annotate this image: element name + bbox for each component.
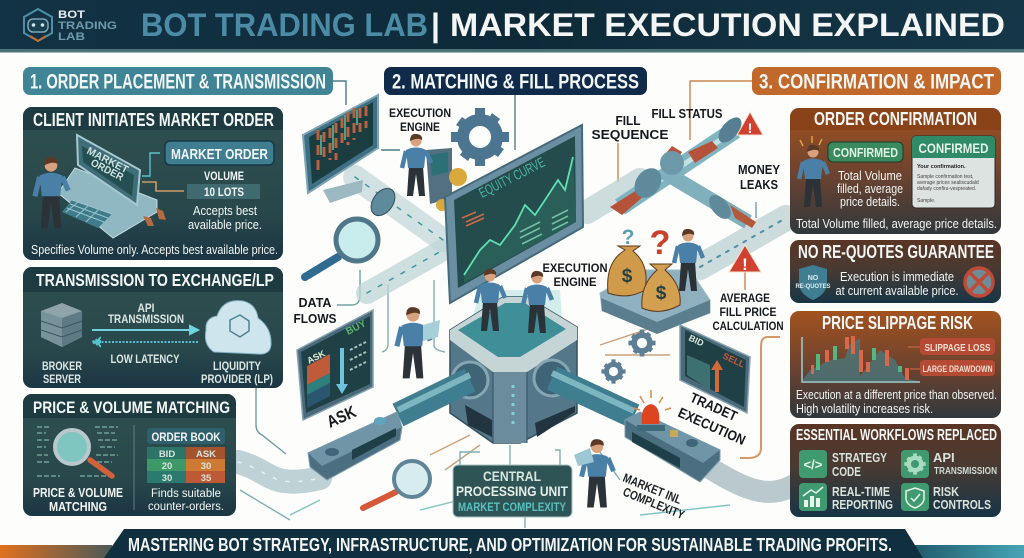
finds suitable text: counter-orders.: [148, 501, 224, 513]
confirmation note text: filled, average: [837, 181, 903, 196]
icon: trader at laptop: ORDER: [89, 157, 126, 184]
label: money leaks: LEAKS: [740, 178, 778, 192]
order book: 30: [162, 473, 172, 484]
confirmation card: Sample confirmation test,: [917, 174, 973, 180]
order book: 20: [162, 461, 172, 472]
confirmation card: Your confirmation.: [917, 164, 966, 170]
matching label: MATCHING: [49, 500, 107, 514]
api transmission label: [933, 450, 997, 477]
panel: bid screen: SELL: [721, 351, 747, 370]
panel: ask screen: [297, 310, 373, 420]
confirmation card: [912, 136, 995, 208]
icon: shield: RE-QUOTES: [796, 283, 831, 290]
icon: trader at laptop: [35, 135, 166, 238]
label: money leaks: MONEY: [738, 163, 781, 177]
footer banner: [0, 529, 1024, 558]
icon: strategy code: </>: [804, 457, 823, 472]
icon: engineer at terminal: [402, 134, 467, 211]
icon: money bags and platform: $: [622, 266, 633, 287]
label: fill sequence: [592, 113, 669, 142]
heading: TRANSMISSION TO EXCHANGE/LP: [36, 270, 274, 290]
label: money leaks: [738, 163, 781, 192]
engineers on central unit: [476, 269, 552, 333]
icon: trader at laptop: MARKET: [85, 145, 131, 176]
arrow: return: [92, 338, 198, 346]
real-time reporting label: [832, 484, 893, 512]
icon: money bags and platform: $: [656, 283, 667, 304]
liquidity provider label: [201, 361, 273, 386]
panel: price and volume matching: [23, 394, 236, 516]
label: execution engine mid: [542, 261, 608, 289]
real-time reporting label: REAL-TIME: [832, 484, 890, 499]
icon: leaking pipes: [610, 113, 756, 228]
real-time reporting label: REPORTING: [832, 497, 893, 512]
panel: client initiates market order: [23, 107, 283, 260]
confirmation note text: [837, 168, 903, 209]
label: market complexity: MARKET INL: [621, 471, 684, 507]
arrow: transmission: [92, 326, 198, 334]
risk controls label: RISK: [933, 484, 960, 499]
left gateway box: [308, 412, 402, 480]
panel: essential workflows replaced: [790, 424, 1001, 517]
badge: slippage loss: [920, 338, 995, 355]
no re-quotes text: [836, 270, 958, 298]
callout: central processing unit: CENTRAL: [483, 468, 541, 484]
pipe left to central unit: [398, 375, 470, 415]
specifies text: Specifies Volume only. Accepts best available price.: [31, 242, 278, 257]
broker server label: [42, 361, 83, 386]
label: average fill price: CALCULATION: [712, 319, 784, 333]
strategy code label: CODE: [832, 464, 861, 479]
icon: api gear: [901, 450, 929, 478]
heading: PRICE & VOLUME MATCHING: [33, 398, 230, 417]
label: data flows: FLOWS: [294, 311, 337, 326]
confirmation card: Sample.: [917, 198, 935, 204]
header band: [0, 0, 1024, 52]
panel: ask screen: BUY: [344, 318, 368, 338]
logo: LAB: [58, 31, 85, 43]
label: execution engine mid: EXECUTION: [542, 261, 608, 275]
api transmission label: TRANSMISSION: [934, 466, 997, 477]
label: tradet execution: EXECUTION: [676, 404, 748, 448]
icon: reporting: [799, 483, 827, 511]
section 1 heading: 1. ORDER PLACEMENT & TRANSMISSION: [30, 70, 326, 94]
label: execution engine top: EXECUTION: [389, 106, 451, 120]
label: data flows: [294, 295, 337, 326]
api transmission label: TRANSMISSION: [108, 314, 184, 326]
order book: BID: [159, 449, 175, 460]
icon: warning top: [737, 112, 763, 136]
callout: central processing unit: PROCESSING UNIT: [456, 483, 568, 499]
no re-quotes text: Execution is immediate: [840, 270, 954, 284]
icon: red alarm: [634, 390, 671, 431]
icon: shield: [796, 265, 831, 300]
panel: bid screen: [680, 325, 750, 413]
liquidity provider label: PROVIDER (LP): [201, 374, 273, 386]
logo: BOT: [58, 9, 85, 21]
badge: large drawdown: LARGE DRAWDOWN: [922, 364, 992, 374]
label: data flows: DATA: [298, 295, 332, 310]
confirmation card: CONFIRMED: [918, 140, 988, 156]
order book: 30: [201, 461, 211, 472]
right gateway box: [625, 412, 720, 482]
label: fill sequence: FILL: [616, 113, 641, 128]
confirmation note text: price details.: [840, 194, 900, 209]
api transmission label: API: [933, 450, 955, 465]
label: average fill price: FILL PRICE: [720, 305, 776, 319]
panel: order confirmation: [790, 108, 1001, 234]
order book: 35: [201, 473, 212, 484]
label: fill status: FILL STATUS: [652, 107, 722, 121]
slippage text: High volatility increases risk.: [796, 402, 933, 416]
slippage text: [796, 388, 997, 416]
label: execution engine mid: ENGINE: [554, 275, 596, 289]
icon: warning lower: [729, 245, 761, 274]
risk controls label: [933, 484, 991, 512]
broker server label: BROKER: [42, 361, 83, 373]
strategy code label: [832, 450, 887, 479]
engineer with tablet lower: [574, 439, 614, 508]
icon: magnifier top: [305, 219, 378, 277]
confirmation card: average prices sealiscudald: [917, 180, 979, 186]
label: tradet execution: [676, 389, 748, 448]
confirmation card: dafady confiru-vespreated.: [917, 186, 976, 192]
volume text: VOLUME: [204, 171, 244, 183]
label: fill sequence: SEQUENCE: [592, 127, 669, 142]
badge: large drawdown: [920, 360, 995, 376]
icon: chart monitor: [303, 95, 378, 203]
accepts best text: Accepts best: [193, 204, 257, 218]
pipe right from central unit: [552, 373, 634, 416]
confirmation note text: Total Volume: [838, 168, 902, 183]
finds suitable text: [148, 488, 224, 513]
data flow ribbons: [238, 177, 815, 492]
order book: [147, 428, 225, 484]
icon: person with note: [799, 136, 828, 207]
title: |: [431, 7, 440, 43]
api transmission label: [108, 303, 184, 326]
icon: money bags and platform: [600, 224, 710, 334]
order book: ASK: [196, 449, 216, 460]
panel: price slippage risk: [790, 311, 1001, 418]
label: average fill price: [712, 291, 784, 333]
callout: central processing unit: [453, 465, 572, 517]
broker server label: SERVER: [43, 374, 82, 386]
bubble: confirmed: [828, 142, 903, 162]
api transmission label: API: [138, 303, 154, 315]
panel: no re-quotes: [790, 240, 1001, 303]
icon: strategy code: [799, 450, 827, 478]
flange on top flow: [366, 184, 400, 220]
finds suitable text: Finds suitable: [151, 488, 221, 500]
market order button: [165, 141, 274, 165]
heading: CLIENT INITIATES MARKET ORDER: [33, 110, 274, 130]
low latency: LOW LATENCY: [110, 354, 180, 366]
icon: magnifier lower: [363, 461, 430, 508]
market order button: MARKET ORDER: [171, 146, 268, 163]
bubble: confirmed: CONFIRMED: [833, 146, 898, 160]
label: market complexity: COMPLEXITY: [621, 485, 687, 522]
heading: ORDER CONFIRMATION: [814, 109, 977, 129]
icon: shield: NO: [808, 275, 819, 282]
panel: transmission to exchange: [23, 267, 283, 388]
lots box: [187, 184, 260, 199]
icon: warning top: !: [748, 120, 752, 136]
title: BOT TRADING LAB: [141, 7, 428, 43]
logo: [24, 9, 117, 43]
icon: money bags and platform: ?: [622, 226, 634, 249]
icon: money bags and platform: ?: [650, 224, 670, 262]
panel: ask screen: ASK: [305, 348, 327, 366]
no re-quotes text: at current available price.: [836, 284, 958, 298]
section 2 heading: [384, 67, 647, 95]
badge: slippage loss: SLIPPAGE LOSS: [924, 342, 990, 354]
liquidity provider label: LIQUIDITY: [213, 361, 261, 373]
title: [141, 7, 1005, 43]
arrows to order: [142, 153, 160, 176]
icon: cross: [965, 268, 993, 296]
panel: bid screen: BID: [687, 333, 706, 349]
label: ask: ASK: [324, 402, 360, 432]
accepts best text: available price.: [188, 218, 262, 232]
icon: broker server: [41, 303, 82, 347]
connector lines: [240, 81, 780, 528]
icon: gear large: [451, 108, 509, 166]
section 2 heading: 2. MATCHING & FILL PROCESS: [392, 70, 639, 94]
label: average fill price: AVERAGE: [720, 291, 770, 305]
order book: ORDER BOOK: [152, 432, 221, 444]
title: MARKET EXECUTION EXPLAINED: [450, 7, 1005, 43]
icon: central processing unit: [450, 297, 577, 443]
engineer with tablet: [397, 307, 440, 378]
matching label: [33, 486, 123, 514]
candlestick chart: [802, 336, 920, 382]
section 1 heading: [23, 67, 333, 95]
icon: shield check: [901, 483, 929, 511]
heading: PRICE SLIPPAGE RISK: [822, 313, 973, 333]
label: execution engine top: [389, 106, 451, 134]
accepts best text: [188, 204, 262, 232]
label: tradet execution: TRADET: [688, 389, 740, 424]
icon: magnifier over data: [37, 427, 118, 476]
icon: warning lower: !: [742, 255, 748, 274]
glow above central unit: [472, 290, 562, 320]
icon: equity curve monitor: EQUITY CURVE: [476, 154, 548, 201]
risk controls label: CONTROLS: [933, 497, 991, 512]
icon: cloud: [205, 301, 271, 354]
callout: central processing unit: MARKET COMPLEXITY: [458, 500, 566, 514]
icon: equity curve monitor: [445, 125, 583, 303]
strategy code label: STRATEGY: [832, 450, 887, 465]
label: execution engine top: ENGINE: [400, 120, 440, 134]
lots box: 10 LOTS: [204, 185, 244, 199]
matching label: PRICE & VOLUME: [33, 486, 123, 500]
logo: TRADING: [58, 20, 117, 32]
icon: small gears: [601, 329, 656, 384]
